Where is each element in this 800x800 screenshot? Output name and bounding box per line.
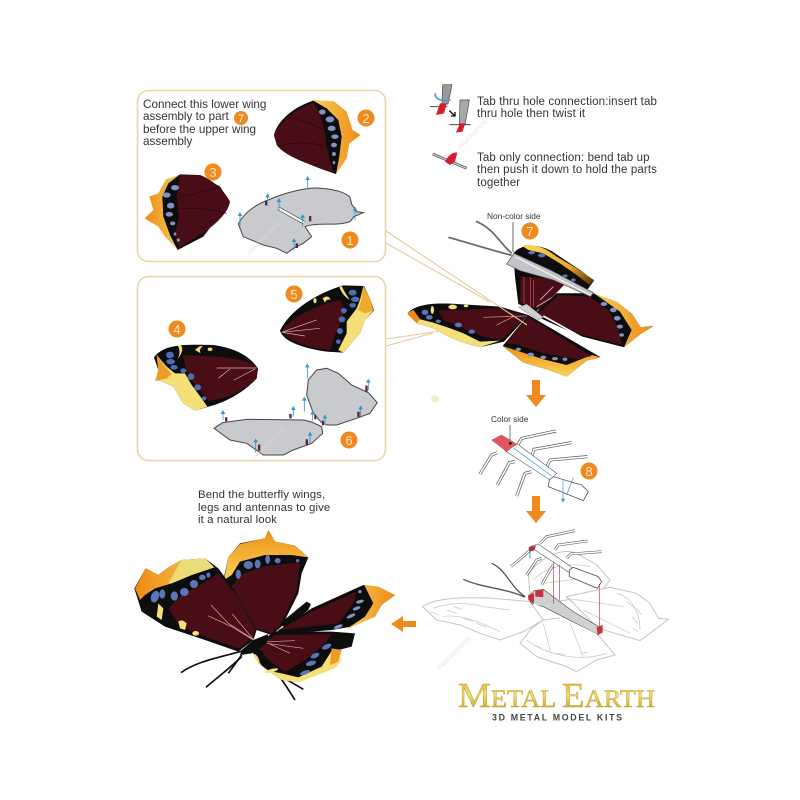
right lower wing (252, 632, 355, 682)
assembly: butterfly outline with body (423, 531, 668, 672)
lower right wing (503, 315, 601, 377)
right upper wing (272, 585, 395, 635)
antennae (463, 563, 525, 597)
connector lines: panels to butterfly (386, 231, 527, 346)
logo tagline: 3D METAL MODEL KITS (492, 712, 622, 722)
wing part 4 (154, 345, 258, 411)
text: tab only: then push it down to hold the parts (477, 164, 657, 176)
watermarks: FASCINATIONS (457, 116, 492, 151)
instruction text: bend wings: it a natural look (198, 514, 277, 526)
badge: 8 (580, 462, 598, 480)
text: tab only: Tab only connection: bend tab up (477, 152, 650, 164)
badge: 6 (340, 432, 358, 448)
pointer line: non-color side (512, 222, 514, 252)
badge: 1 (342, 232, 358, 248)
badge: 6: 6 (345, 433, 353, 448)
instruction text: connect lower wing: Connect this lower wing (143, 98, 266, 111)
badge: 4 (168, 320, 186, 338)
antennae (448, 221, 512, 255)
upper back wing (513, 245, 594, 312)
rear black wing edge (280, 602, 311, 628)
icon: tab thru hole connection (430, 85, 471, 133)
text: tab thru hole: thru hole then twist it (477, 108, 586, 120)
badge: 2: 2 (362, 111, 370, 126)
badge: inline 7: 7 (238, 113, 244, 125)
label: color side: Color side (491, 414, 529, 424)
arrow: left to finished butterfly (391, 616, 416, 632)
text: tab only: together (477, 177, 520, 189)
right wing (533, 293, 653, 347)
top wing (223, 530, 308, 635)
metal part 6 (214, 363, 377, 455)
badge: 1: 1 (346, 233, 354, 248)
instruction text: bend wings: Bend the butterfly wings, (198, 489, 325, 501)
metal part 1 (238, 176, 363, 253)
instruction text: connect lower wing: assembly (143, 135, 193, 148)
decorative dot (431, 395, 439, 403)
badge: 5 (286, 286, 302, 302)
badge: 2 (358, 110, 374, 126)
legs and antennae (181, 650, 303, 700)
legs (511, 531, 602, 585)
metal body (507, 253, 593, 343)
instruction text: connect lower wing: before the upper wing (143, 123, 256, 136)
watermarks (247, 116, 492, 671)
panel: lower wing assembly (138, 90, 386, 262)
text: tab thru hole: Tab thru hole connection:insert tab (477, 96, 657, 108)
icon: tab only connection (433, 152, 467, 168)
arrow: down 1 (526, 380, 546, 407)
outline wings (423, 552, 668, 672)
legs part 8 (480, 425, 588, 503)
badge: 5: 5 (290, 287, 298, 302)
instruction text: bend wings: legs and antennas to give (198, 502, 330, 514)
logo: Metal Earth: METAL EARTH (458, 676, 655, 715)
wing part 2 (274, 100, 361, 174)
badge: 3: 3 (209, 165, 217, 180)
arrow: down 2 (526, 496, 546, 523)
watermarks: FASCINATIONS (252, 426, 287, 461)
badge: 7 (522, 222, 538, 240)
badge: 4: 4 (173, 322, 181, 337)
body (240, 634, 268, 655)
badge: 8: 8 (585, 464, 593, 479)
badge: 7: 7 (526, 224, 534, 239)
lower left wing (407, 304, 528, 347)
instruction text: connect lower wing: assembly to part (143, 110, 229, 123)
main spine (528, 589, 602, 635)
panel: upper wing assembly (138, 276, 386, 460)
badge: inline 7 (234, 111, 248, 125)
badge: 3 (204, 164, 222, 180)
left wing (134, 558, 257, 652)
butterfly: step 7 assembly (407, 221, 653, 377)
watermarks: FASCINATIONS (247, 221, 282, 256)
wing part 5 (280, 285, 374, 353)
watermarks: FASCINATIONS (437, 636, 472, 671)
finished butterfly (134, 530, 395, 700)
wing part 3 (145, 174, 230, 250)
label: non-color side: Non-color side (487, 211, 541, 221)
